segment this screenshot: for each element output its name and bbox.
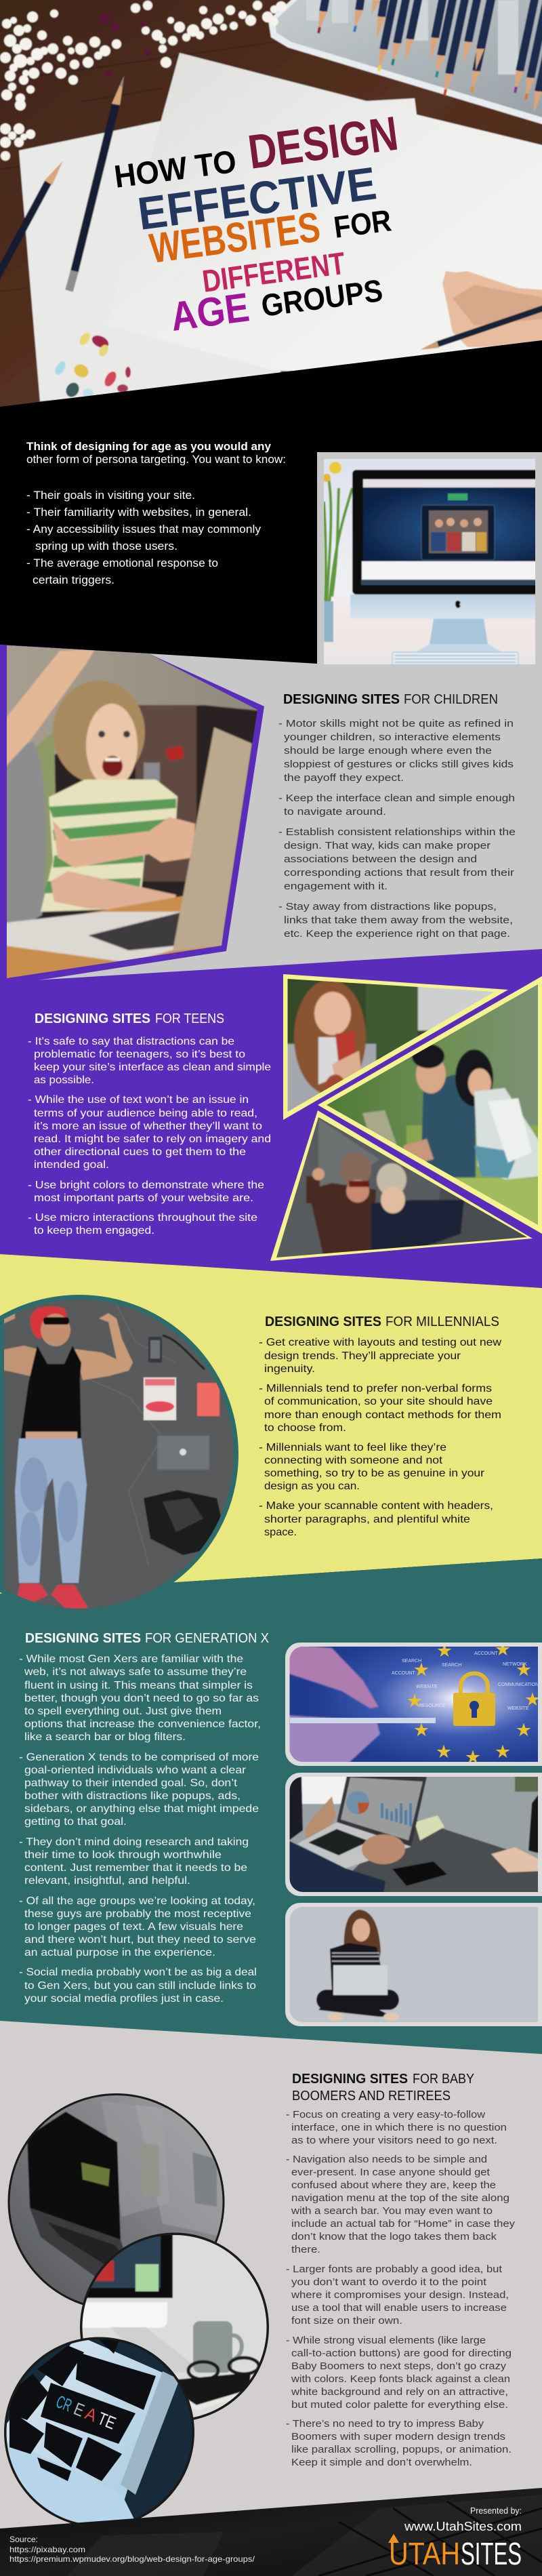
panel: generation x text: - While most Gen Xers are familiar with the bbox=[19, 1653, 243, 1665]
logo: Utah Sites: UTAH bbox=[389, 2536, 460, 2571]
panel: security hands photo bbox=[285, 1639, 542, 1767]
intro text block: - Any accessibility issues that may commonly bbox=[26, 523, 262, 536]
panel: boomers text: white background and rely on an attractive, bbox=[291, 2387, 508, 2398]
section: generation x teal background bbox=[0, 1558, 542, 2055]
panel: woman with laptop photo bbox=[285, 1903, 542, 2026]
panel: generation x text: like a search bar or blog filters. bbox=[24, 1731, 186, 1743]
colour scribbles bbox=[53, 331, 131, 399]
panel: teens text: - It’s safe to say that distractions can be bbox=[28, 1036, 234, 1047]
title: DESIGN bbox=[245, 107, 401, 180]
panel: boomers text: where it compromises your design. Instead, bbox=[291, 2290, 509, 2301]
panel: two friends triangle photo bbox=[268, 1108, 535, 1264]
panel: laptop analytics photo bbox=[285, 1773, 542, 1896]
panel: teen girl triangle photo bbox=[281, 973, 508, 1122]
panel: children text: design. That way, kids can make proper bbox=[284, 840, 491, 851]
panel: boomers text bbox=[286, 2072, 516, 2468]
panel: generation x text: web, it’s not always safe to assume they’re bbox=[24, 1666, 247, 1678]
image: circle with laptop dashboard bbox=[3, 2088, 230, 2318]
generation x heading bbox=[25, 1631, 269, 1646]
intro text block: - Their goals in visiting your site. bbox=[26, 489, 195, 502]
intro text block bbox=[26, 441, 286, 586]
panel: excited child photo with purple frame bbox=[0, 637, 271, 990]
logo: Utah Sites bbox=[388, 2534, 522, 2571]
second pencil bbox=[0, 161, 63, 278]
footer band bbox=[0, 2488, 542, 2576]
chair bbox=[7, 742, 47, 923]
panel: children text: - Motor skills might not be quite as refined in bbox=[278, 718, 514, 729]
panel: millennials text: of communication, so your site should have bbox=[264, 1396, 493, 1407]
panel: children text: associations between the design and bbox=[284, 853, 477, 865]
long pencil bbox=[69, 76, 124, 291]
panel: millennials text: to choose from. bbox=[264, 1422, 346, 1434]
stars: ★ bbox=[436, 1742, 452, 1762]
CREATE label: E bbox=[71, 2398, 87, 2421]
phone bbox=[392, 1861, 447, 1886]
CREATE label: CR bbox=[54, 2391, 75, 2415]
pointing arm bbox=[53, 817, 195, 868]
panel: children text: - Establish consistent relationships within the bbox=[278, 826, 516, 838]
hair bbox=[53, 681, 145, 784]
title: WEBSITES bbox=[147, 203, 323, 273]
panel: generation x text: relevant, insightful, and helpful. bbox=[24, 1875, 190, 1887]
pencils in tin bbox=[318, 0, 542, 113]
panel: generation x text: pathway to their intended goal. So, don’t bbox=[24, 1777, 238, 1789]
panel: boomers text: Baby Boomers to next steps, don’t go crazy bbox=[291, 2361, 507, 2372]
screen bbox=[337, 1773, 427, 1847]
panel: teens text: terms of your audience being able to read, bbox=[34, 1108, 257, 1119]
stars: ★ bbox=[406, 1691, 423, 1711]
panel: generation x text: - Social media probably won’t be as big a deal bbox=[19, 1967, 257, 1978]
panel: millennials text: space. bbox=[264, 1527, 297, 1538]
panel: security hands photo: SEARCH bbox=[402, 1659, 421, 1664]
keyboard bbox=[392, 652, 518, 666]
glasses bbox=[188, 2358, 259, 2379]
panel: security hands photo: WEBSITE bbox=[416, 1685, 438, 1689]
stars: ★ bbox=[413, 1659, 430, 1680]
panel: boomers text: - Navigation also needs to be simple and bbox=[286, 2154, 487, 2165]
panel: boomers text: there. bbox=[291, 2245, 320, 2255]
panel: millennials text: design as you can. bbox=[264, 1481, 360, 1492]
arms bbox=[0, 1346, 37, 1376]
intro text block: other form of persona targeting. You want to know: bbox=[26, 454, 286, 466]
panel: teens text: it’s more an issue of whether they’ll want to bbox=[34, 1121, 262, 1132]
title: DIFFERENT bbox=[201, 245, 347, 299]
metal tin bbox=[268, 0, 542, 126]
panel: generation x text: to spell everything out. Just give them bbox=[24, 1706, 222, 1717]
tank top bbox=[20, 1346, 81, 1444]
panel: generation x text: - Generation X tends to be comprised of more bbox=[19, 1752, 259, 1763]
section: millennials yellow background bbox=[0, 1254, 542, 1594]
panel: teens text: intended goal. bbox=[34, 1159, 109, 1171]
panel: generation x text: fluent in using it. This means that simpler is bbox=[24, 1680, 253, 1691]
waist bbox=[26, 1432, 77, 1440]
panel: generation x text: to longer pages of text. A few visuals here bbox=[24, 1921, 243, 1933]
children heading: DESIGNING SITES bbox=[283, 692, 400, 707]
image: circle with CREATE keyboard key bbox=[4, 2335, 197, 2529]
intro text block: - The average emotional response to bbox=[26, 557, 218, 569]
jeans bbox=[15, 1438, 87, 1583]
panel: boomers text: Boomers with super modern design trends bbox=[291, 2432, 505, 2442]
panel: boomers text: but muted color palette for everything else. bbox=[291, 2400, 508, 2411]
panel: security hands photo: NETWORK bbox=[503, 1662, 527, 1667]
laptop bbox=[157, 1436, 209, 1470]
intro text block: certain triggers. bbox=[33, 574, 114, 586]
raised arm bbox=[7, 649, 95, 767]
panel: boomers text: - Focus on creating a very easy-to-follow bbox=[286, 2110, 486, 2120]
panel: children text: - Keep the interface clean and simple enough bbox=[278, 792, 515, 804]
panel: millennials text: more than enough contact methods for them bbox=[264, 1409, 501, 1421]
shoes bbox=[17, 1583, 48, 1605]
panel: children text: etc. Keep the experience right on that page. bbox=[284, 928, 510, 940]
panel: generation x text bbox=[19, 1631, 269, 2005]
iMac stand bbox=[430, 619, 488, 644]
panel: teens text: as possible. bbox=[34, 1074, 94, 1086]
panel: children text: to navigate around. bbox=[284, 806, 386, 818]
intro text block: Think of designing for age as you would any bbox=[26, 441, 272, 453]
hat bbox=[30, 1306, 68, 1339]
stars bbox=[406, 1639, 541, 1767]
stars: ★ bbox=[495, 1639, 511, 1659]
panel: teens text: to keep them engaged. bbox=[34, 1225, 154, 1236]
panel: millennials text: - Millennials tend to prefer non-verbal forms bbox=[259, 1383, 492, 1394]
panel: teens text bbox=[28, 1011, 271, 1236]
left paper sheet bbox=[19, 121, 285, 401]
sleeve bbox=[285, 1838, 385, 1895]
intro text block: spring up with those users. bbox=[35, 540, 178, 552]
panel: millennials text: ingenuity. bbox=[264, 1363, 315, 1375]
panel: children text: should be large enough where even the bbox=[284, 745, 492, 757]
front paper sheet bbox=[160, 52, 542, 372]
panel: teens text: read. It might be safer to rely on imagery and bbox=[34, 1133, 271, 1145]
panel: man lying on asphalt circle photo bbox=[0, 1288, 244, 1620]
table bbox=[352, 1817, 542, 1895]
intro text block: - Their familiarity with websites, in general. bbox=[26, 506, 251, 519]
hand bbox=[362, 1834, 405, 1864]
panel: boomers text: with a search bar. You may even want to bbox=[291, 2206, 493, 2217]
panel: boomers text: don’t know that the logo takes them back bbox=[291, 2232, 497, 2242]
panel: generation x text: sidebars, or anything else that might impede bbox=[24, 1803, 259, 1815]
boomers heading: BOOMERS AND RETIREES bbox=[292, 2089, 451, 2104]
panel: generation x text: and there won’t hurt, but they need to serve bbox=[24, 1934, 256, 1946]
panel: security hands photo: SEARCH bbox=[442, 1663, 461, 1668]
title: HOW TO bbox=[112, 143, 238, 195]
panel: children text: younger children, so interactive elements bbox=[284, 731, 501, 743]
millennials heading: FOR MILLENNIALS bbox=[385, 1314, 499, 1329]
panel: security hands photo: COMMUNICATION bbox=[498, 1683, 539, 1687]
magazine bbox=[144, 1377, 176, 1420]
panel: millennials text: - Get creative with layouts and testing out new bbox=[259, 1337, 501, 1348]
striped shirt bbox=[41, 780, 178, 912]
panel: children text: engagement with it. bbox=[284, 881, 388, 892]
title bbox=[112, 107, 401, 340]
panel: millennials text: design trends. They’ll appreciate your bbox=[264, 1350, 461, 1362]
panel: boomers text: like parallax scrolling, popups, or animation. bbox=[291, 2444, 512, 2455]
panel: teens text: other directional cues to get them to the bbox=[34, 1146, 246, 1158]
boomers heading: DESIGNING SITES bbox=[292, 2072, 408, 2087]
children heading: FOR CHILDREN bbox=[404, 692, 498, 707]
panel: generation x text: - They don’t mind doing research and taking bbox=[19, 1836, 249, 1848]
CREATE label: TE bbox=[95, 2408, 119, 2434]
title: FOR bbox=[332, 203, 394, 245]
iMac screen bbox=[352, 470, 542, 595]
section: teens purple background bbox=[0, 949, 542, 1288]
panel: millennials text: connecting with someone and not bbox=[264, 1455, 443, 1466]
panel: boomers text: - Larger fonts are probably a good idea, but bbox=[286, 2264, 502, 2275]
table bbox=[7, 895, 224, 978]
stars: ★ bbox=[413, 1720, 430, 1740]
panel: security hands photo: RESOURCE bbox=[419, 1704, 446, 1708]
presented by bbox=[404, 2505, 522, 2533]
panel: boomers text: with colors. Keep fonts black against a clean bbox=[291, 2374, 510, 2385]
image: circle with monitor and mug bbox=[78, 2227, 271, 2423]
panel: children text: the payoff they expect. bbox=[284, 772, 404, 784]
panel: boomers text: as to where your visitors need to go next. bbox=[291, 2135, 497, 2146]
generation x heading: FOR GENERATION X bbox=[145, 1631, 269, 1646]
panel: boomers text: you don’t want to overdo it to the point bbox=[291, 2277, 486, 2288]
panel: generation x text: these guys are probably the most receptive bbox=[24, 1908, 251, 1920]
source credits bbox=[9, 2535, 255, 2564]
title: EFFECTIVE bbox=[135, 157, 379, 240]
panel: security hands photo: ACCOUNT bbox=[474, 1651, 498, 1656]
presented by: www.UtahSites.com bbox=[404, 2519, 522, 2533]
stars: ★ bbox=[524, 1689, 541, 1710]
panel: generation x text: options that increase the convenience factor, bbox=[24, 1718, 261, 1730]
section: black intro background bbox=[0, 332, 542, 675]
padlock bbox=[453, 1673, 495, 1726]
panel: generation x text: their time to look through worthwhile bbox=[24, 1849, 222, 1861]
generation x heading: DESIGNING SITES bbox=[25, 1631, 141, 1646]
panel: teens text: problematic for teenagers, so it’s best to bbox=[34, 1049, 245, 1060]
boomers heading bbox=[292, 2072, 474, 2104]
hand holding a pencil bbox=[420, 271, 542, 350]
boomers heading: FOR BABY bbox=[413, 2072, 474, 2087]
panel: generation x text: your social media profiles just in case. bbox=[24, 1993, 224, 2005]
arm left bbox=[285, 1773, 303, 1844]
panel: generation x text: - Of all the age groups we’re looking at today, bbox=[19, 1895, 255, 1907]
left friend bbox=[308, 1183, 376, 1264]
stars: ★ bbox=[465, 1747, 481, 1767]
source credits: Source: bbox=[9, 2535, 38, 2544]
daffodils bbox=[322, 462, 352, 642]
panel: iMac photo bbox=[317, 452, 542, 671]
section: children grey background bbox=[0, 641, 542, 983]
teens heading: DESIGNING SITES bbox=[35, 1011, 150, 1026]
panel: millennials text: - Millennials want to feel like they’re bbox=[259, 1442, 446, 1453]
red notebook bbox=[197, 1383, 220, 1416]
panel: generation x text: bother with distractions like popups, ads, bbox=[24, 1790, 241, 1802]
panel: generation x text: better, though you don’t need to go so far as bbox=[24, 1693, 259, 1704]
lower arm bbox=[51, 871, 176, 912]
panel: teens text: - Use micro interactions throughout the site bbox=[28, 1212, 257, 1224]
stars: ★ bbox=[436, 1641, 453, 1661]
CREATE label bbox=[54, 2391, 119, 2434]
face bbox=[86, 704, 138, 788]
black wedge above children section bbox=[0, 475, 542, 664]
teens heading: FOR TEENS bbox=[155, 1011, 224, 1026]
panel: boomers text: - While strong visual elements (like large bbox=[286, 2335, 486, 2346]
panel: teens text: - While the use of text won’t be an issue in bbox=[28, 1094, 249, 1106]
panel: teen couple triangle photo bbox=[318, 976, 542, 1234]
panel: millennials text: something, so try to be as genuine in your bbox=[264, 1468, 485, 1479]
notebook bbox=[178, 2373, 251, 2405]
tablet bbox=[415, 1815, 444, 1840]
panel: boomers text: call-to-action buttons) are good for directing bbox=[291, 2348, 512, 2359]
section: boomers grey background bbox=[0, 2021, 542, 2532]
panel: children text: links that take them away from the website, bbox=[284, 914, 513, 926]
boy bbox=[421, 1074, 476, 1178]
panel: teens text: most important parts of your website are. bbox=[34, 1192, 253, 1204]
panel: boomers text: confused about where they are, keep the bbox=[291, 2180, 496, 2191]
panel: boomers text: include an actual tab for “Home” in case they bbox=[291, 2219, 516, 2230]
panel: security hands photo: ACCOUNT bbox=[392, 1671, 415, 1676]
panel: generation x text: to Gen Xers, but you can still include links to bbox=[24, 1980, 256, 1992]
panel: teens text: keep your site’s interface as clean and simple bbox=[34, 1062, 271, 1073]
source credits: https://premium.wpmudev.org/blog/web-design-for-age-groups/ bbox=[9, 2554, 255, 2564]
panel: children text: sloppiest of gestures or clicks still gives kids bbox=[284, 759, 514, 770]
stars: ★ bbox=[516, 1720, 532, 1740]
hero photo: desk with papers, flowers and pencils bbox=[0, 0, 542, 420]
baby's breath flowers bbox=[0, 1, 287, 161]
panel: children text: corresponding actions that result from their bbox=[284, 867, 514, 879]
stars: ★ bbox=[516, 1659, 532, 1680]
panel: boomers text: ever-present. In case anyone should get bbox=[291, 2167, 490, 2178]
presented by: Presented by: bbox=[470, 2505, 522, 2516]
panel: millennials text bbox=[259, 1314, 501, 1538]
backpack bbox=[144, 1490, 222, 1555]
stars: ★ bbox=[495, 1742, 511, 1762]
teens heading bbox=[35, 1011, 224, 1026]
source credits: https://pixabay.com bbox=[9, 2545, 85, 2554]
panel: millennials text: shorter paragraphs, and plentiful white bbox=[264, 1514, 470, 1525]
iMac chin bbox=[350, 595, 542, 619]
panel: boomers text: navigation menu at the top of the site along bbox=[291, 2193, 509, 2204]
laptop base bbox=[0, 912, 183, 963]
laptop lid bbox=[173, 727, 252, 951]
panel: teens text: - Use bright colors to demonstrate where the bbox=[28, 1180, 264, 1191]
panel: children text: - Stay away from distractions like popups, bbox=[278, 901, 497, 912]
laptop base bbox=[297, 1822, 411, 1868]
headphones cable bbox=[163, 1335, 205, 1369]
laptop bbox=[362, 1110, 397, 1146]
speaker grille bbox=[121, 2371, 180, 2495]
CREATE label: A bbox=[82, 2403, 100, 2426]
panel: boomers text: - There’s no need to try to impress Baby bbox=[286, 2419, 484, 2430]
panel: generation x text: goal-oriented individuals who want a clear bbox=[24, 1765, 247, 1776]
panel: boomers text: interface, one in which there is no question bbox=[291, 2122, 507, 2133]
phone bbox=[148, 1337, 162, 1363]
panel: generation x text: an actual purpose in the experience. bbox=[24, 1947, 215, 1958]
children heading bbox=[283, 692, 498, 707]
right friend bbox=[371, 1200, 464, 1261]
panel: children text bbox=[278, 692, 516, 940]
panel: boomers text: font size on their own. bbox=[291, 2316, 402, 2327]
panel: generation x text: getting to that goal. bbox=[24, 1816, 127, 1828]
panel: generation x text: content. Just remember that it needs to be bbox=[24, 1862, 247, 1874]
panel: boomers text: use a tool that will enable users to increase bbox=[291, 2303, 507, 2314]
title: GROUPS bbox=[259, 273, 385, 323]
girl bbox=[455, 1049, 493, 1106]
millennials heading bbox=[265, 1314, 499, 1329]
right hands bbox=[491, 1847, 542, 1872]
millennials heading: DESIGNING SITES bbox=[265, 1314, 381, 1329]
face bbox=[41, 1314, 70, 1346]
black keys bbox=[9, 2339, 156, 2481]
panel: millennials text: - Make your scannable content with headers, bbox=[259, 1500, 493, 1512]
title: AGE bbox=[168, 284, 252, 340]
panel: boomers text: Keep it simple and don’t overwhelm. bbox=[291, 2457, 472, 2468]
panel: security hands photo: WEBSITE bbox=[507, 1706, 529, 1711]
